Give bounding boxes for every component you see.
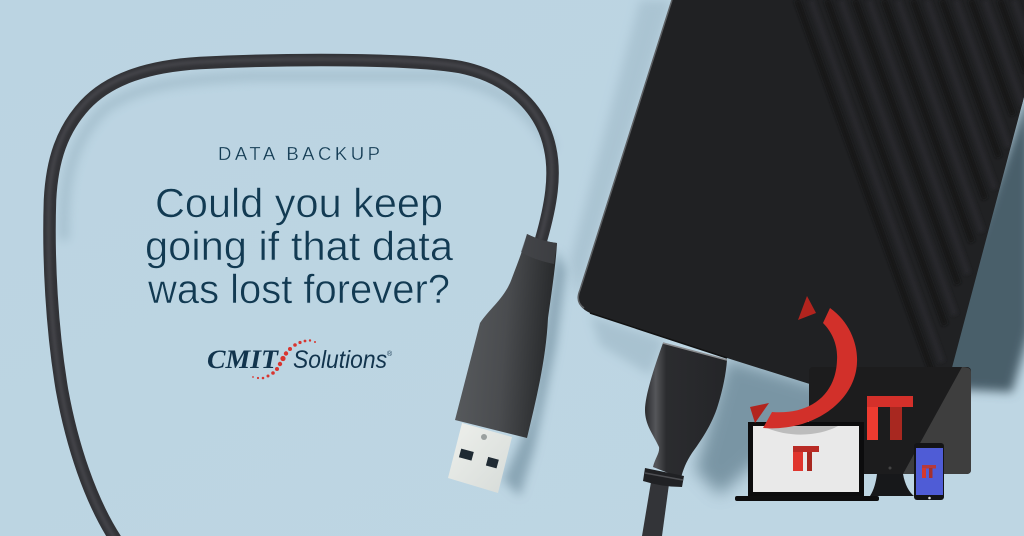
logo red dots	[252, 339, 316, 379]
drive shadow	[503, 0, 1024, 496]
USB plug	[448, 234, 557, 493]
hard drive	[578, 0, 1024, 424]
headline: going if that data	[145, 223, 453, 269]
monitor	[809, 367, 971, 496]
drive diagonal stripes	[797, 0, 1024, 372]
CMIT Solutions logo: CMIT	[207, 345, 279, 374]
USB metal connector	[448, 423, 512, 493]
headline: was lost forever?	[147, 266, 450, 312]
laptop	[735, 422, 879, 501]
CMIT Solutions logo	[207, 339, 393, 379]
eyebrow: data backup: DATA BACKUP	[218, 143, 380, 164]
headline: Could you keep	[155, 180, 443, 226]
monitor IT logo	[867, 396, 913, 440]
devices icon with red backup arrow	[735, 296, 971, 501]
phone	[914, 443, 944, 500]
red circular arrow	[750, 296, 857, 428]
headline	[145, 180, 453, 312]
USB cable shadow	[64, 76, 552, 240]
drive connector and cable	[642, 343, 727, 536]
CMIT Solutions logo: ®	[387, 350, 393, 358]
phone IT logo	[922, 465, 936, 478]
CMIT Solutions logo: Solutions	[293, 346, 387, 374]
USB cable	[48, 59, 553, 536]
laptop IT logo	[793, 446, 819, 471]
